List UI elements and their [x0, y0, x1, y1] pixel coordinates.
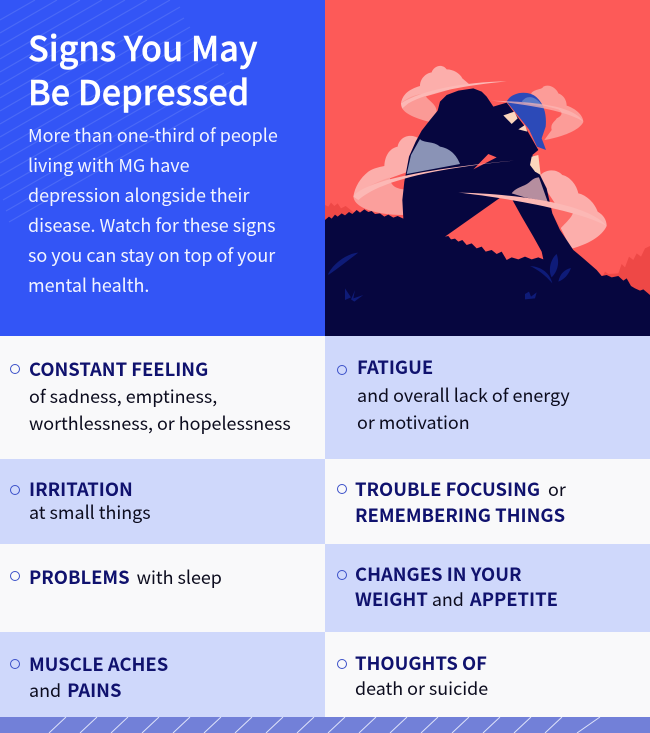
panel: changes in weight	[325, 544, 650, 632]
bullet	[337, 365, 347, 375]
intro text: depression alongside their	[28, 182, 249, 208]
intro text: living with MG have	[28, 152, 190, 178]
intro text	[28, 122, 278, 298]
panel: intro	[0, 0, 325, 336]
text: and PAINS	[29, 677, 121, 703]
bullet	[337, 484, 347, 494]
text: PROBLEMS with sleep	[29, 564, 222, 590]
text	[357, 354, 570, 435]
bullet	[10, 364, 20, 374]
text: CHANGES IN YOUR	[355, 561, 522, 587]
wind streaks	[353, 81, 607, 226]
text	[29, 356, 291, 436]
title: Signs You May	[28, 21, 258, 71]
panel: fatigue	[325, 336, 650, 459]
hill and person silhouette	[325, 88, 650, 336]
cloud right	[538, 170, 607, 249]
text	[29, 651, 168, 703]
text	[355, 561, 558, 612]
text: and overall lack of energy	[357, 382, 570, 408]
text: at small things	[29, 499, 151, 525]
text: WEIGHT and APPETITE	[355, 586, 558, 612]
cloud top right	[528, 86, 583, 140]
text: worthlessness, or hopelessness	[29, 410, 291, 436]
text: or motivation	[357, 409, 470, 435]
text	[29, 476, 151, 525]
text: death or suicide	[355, 675, 488, 701]
text	[355, 650, 488, 701]
gap under the thigh	[445, 197, 543, 260]
text: MUSCLE ACHES	[29, 651, 168, 677]
text: TROUBLE FOCUSING or	[355, 476, 566, 502]
title	[28, 21, 258, 114]
panel: trouble focusing	[325, 459, 650, 544]
footer band	[0, 717, 650, 733]
bullet	[10, 571, 20, 581]
clouds behind	[353, 66, 607, 249]
hat	[507, 93, 546, 150]
bullet	[10, 659, 20, 669]
arm gap	[473, 154, 497, 169]
face	[503, 112, 518, 124]
cloud mid left	[353, 136, 420, 197]
panel: thoughts of	[325, 632, 650, 717]
illustration: person sitting on a hill with clouds	[325, 0, 650, 336]
cloud top left	[401, 66, 469, 108]
panel: muscle aches	[0, 632, 325, 717]
intro text: disease. Watch for these signs	[28, 212, 276, 238]
intro text: More than one-third of people	[28, 122, 278, 148]
panel: problems with sleep	[0, 544, 325, 632]
panel: irritation	[0, 459, 325, 544]
foreground plants	[328, 253, 571, 302]
intro text: so you can stay on top of your	[28, 242, 275, 268]
text: FATIGUE	[357, 354, 433, 380]
text: IRRITATION	[29, 476, 133, 502]
bullet	[337, 659, 347, 669]
far grass	[325, 203, 650, 297]
text: CONSTANT FEELING	[29, 356, 208, 382]
bullet	[10, 485, 20, 495]
text: THOUGHTS OF	[355, 650, 487, 676]
panel: constant feeling	[0, 336, 325, 459]
text: of sadness, emptiness,	[29, 383, 217, 409]
title: Be Depressed	[28, 64, 249, 114]
translucent cloud parts over person	[407, 139, 460, 174]
intro text: mental health.	[28, 272, 149, 298]
text: REMEMBERING THINGS	[355, 502, 565, 528]
bullet	[337, 570, 347, 580]
text	[355, 476, 566, 528]
